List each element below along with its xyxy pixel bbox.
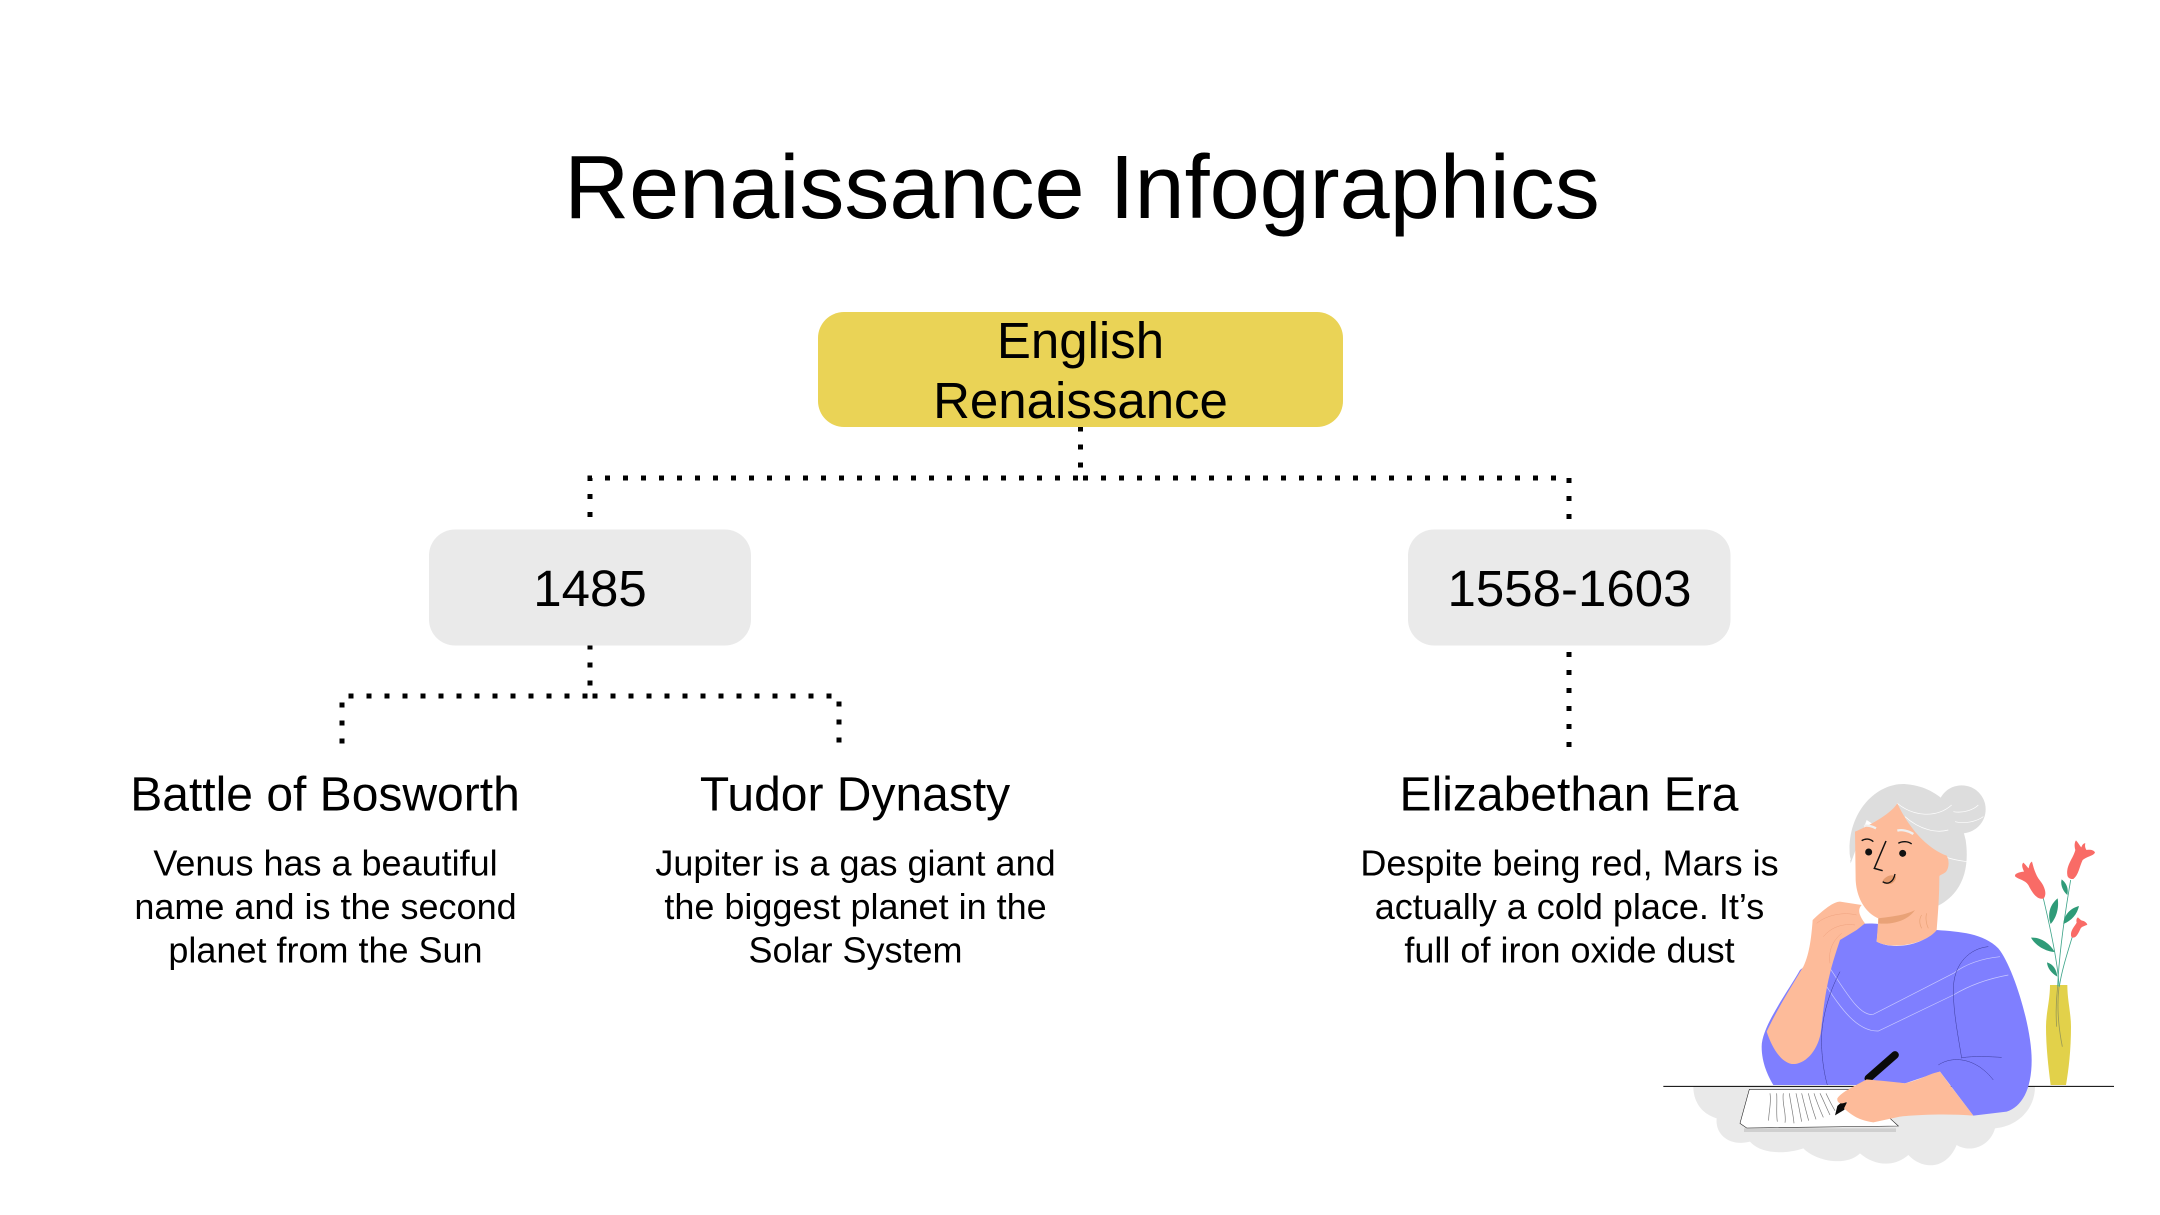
pen: [1835, 1055, 1895, 1115]
hair: [1848, 784, 1986, 906]
node: 1485: [429, 530, 751, 646]
text block: Battle of Bosworth: name and is the second: [134, 886, 517, 927]
text block: Elizabethan Era: actually a cold place. It’s: [1375, 886, 1764, 927]
text block: Tudor Dynasty: [655, 768, 1056, 971]
node: 1485: 1485: [533, 560, 647, 617]
vase with flowers: [2015, 840, 2095, 1085]
writing arm and hand: [1837, 1072, 1973, 1122]
text block: Battle of Bosworth: Venus has a beautiful: [153, 843, 498, 884]
node: 1558-1603: [1408, 530, 1730, 646]
text block: Elizabethan Era: [1360, 768, 1779, 971]
text block: Tudor Dynasty: Tudor Dynasty: [700, 768, 1010, 822]
text block: Tudor Dynasty: the biggest planet in the: [664, 886, 1047, 927]
cloud shadow under table: [1693, 1087, 2035, 1165]
connector: 1485 to events: [342, 644, 839, 748]
connector: root to periods: [590, 426, 1569, 522]
raised arm and hand: [1767, 902, 1865, 1064]
node: 1558-1603: 1558-1603: [1448, 560, 1691, 617]
text block: Battle of Bosworth: planet from the Sun: [168, 930, 483, 971]
root node: English Renaissance: Renaissance: [933, 372, 1228, 429]
text block: Elizabethan Era: Despite being red, Mars is: [1360, 843, 1779, 884]
text block: Tudor Dynasty: Solar System: [748, 930, 963, 971]
root node: English Renaissance: English: [997, 312, 1164, 369]
title: Renaissance Infographics: [564, 138, 1600, 238]
text block: Elizabethan Era: Elizabethan Era: [1400, 768, 1739, 822]
root node: English Renaissance: [818, 312, 1343, 429]
text block: Tudor Dynasty: Jupiter is a gas giant and: [655, 843, 1056, 884]
illustration: woman writing at a table: [1663, 784, 2114, 1165]
sweater: [1762, 923, 2032, 1116]
eyes, brows, nose and mouth: [1862, 826, 1928, 928]
text block: Battle of Bosworth: [130, 768, 520, 971]
paper with writing: [1740, 1089, 1898, 1132]
text block: Battle of Bosworth: Battle of Bosworth: [130, 768, 520, 822]
face and neck: [1855, 803, 1949, 946]
text block: Elizabethan Era: full of iron oxide dust: [1404, 930, 1735, 971]
connector: 1558-1603 to Elizabethan Era: [1566, 652, 1572, 750]
table edge: [1663, 1085, 2114, 1088]
sweater details: [1827, 957, 2008, 1031]
